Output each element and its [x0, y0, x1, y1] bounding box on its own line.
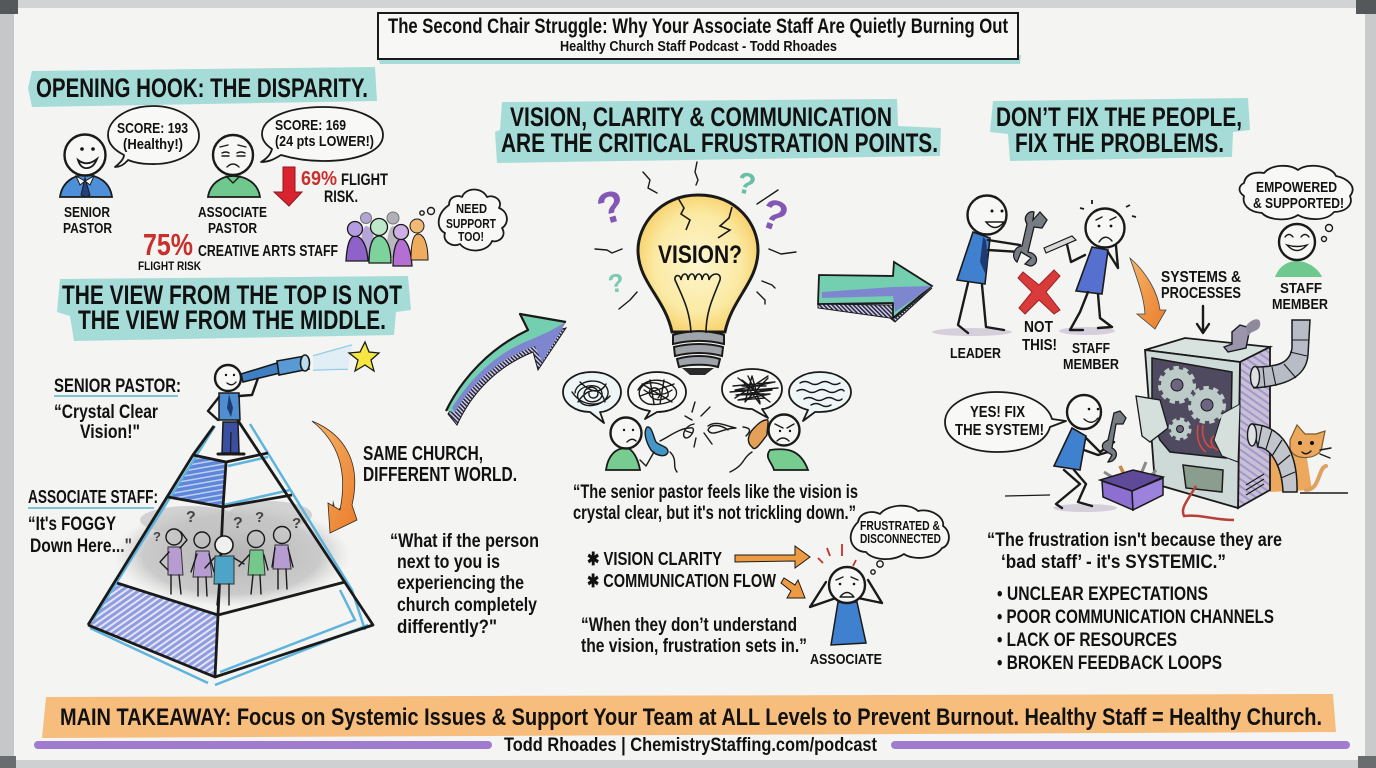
staff member worried figure: STAFF: [1072, 340, 1110, 357]
quote: senior pastor feels: [573, 482, 858, 524]
gears: [1161, 369, 1223, 438]
decorative bulb sparks and question marks: ?: [734, 166, 759, 202]
machine chimney: [1224, 325, 1250, 352]
associate staff label: Down Here...": [30, 536, 132, 557]
bullet list: systemic problems: • BROKEN FEEDBACK LOOPS: [997, 653, 1222, 674]
stat: 75% flight risk creative arts staff: CREATIVE ARTS STAFF: [198, 243, 338, 260]
associate pastor figure: ASSOCIATE: [198, 204, 267, 221]
machine side: [1238, 347, 1270, 508]
heading: fix the problems: DON’T FIX THE PEOPLE,: [996, 102, 1242, 132]
quote: frustration systemic: ‘bad staff’ - it's SYSTEMIC.”: [1001, 552, 1226, 573]
people in fog: ?: [255, 509, 264, 526]
staff member happy figure: [1272, 224, 1328, 313]
machine front: [1145, 350, 1240, 508]
arrow: communication flow to associate: [781, 578, 805, 598]
arrow: large curved up: [446, 314, 566, 425]
panel: opening hook: [28, 67, 507, 273]
heading: vision clarity: ARE THE CRITICAL FRUSTRATION POINTS.: [501, 128, 938, 158]
thought cloud: need support too: NEED: [456, 201, 487, 216]
speech bubble: score 169: [261, 107, 383, 162]
staff member worried figure: [1044, 200, 1136, 373]
machine interior: [1152, 358, 1232, 458]
quote: what if the person: next to you is: [397, 552, 500, 573]
thought cloud: need support too: SUPPORT: [446, 216, 496, 231]
label: systems and processes: SYSTEMS &: [1161, 269, 1241, 286]
senior pastor label: Vision!": [80, 422, 140, 443]
stat: 69% flight risk: RISK.: [324, 187, 358, 206]
quote: what if the person: church completely: [397, 595, 537, 616]
decorative bulb sparks and question marks: [592, 162, 796, 309]
people in fog: ?: [292, 515, 301, 532]
thought cloud: empowered and supported: & SUPPORTED!: [1253, 195, 1344, 212]
thought cloud: empowered and supported: [1240, 166, 1353, 242]
icon: red X not this: THIS!: [1022, 337, 1057, 354]
heading: vision clarity: [495, 99, 941, 163]
label: systems and processes: [1161, 269, 1241, 333]
thought cloud: frustrated and disconnected: FRUSTRATED &: [860, 519, 940, 533]
list: vision clarity and communication flow: ✱ VISION CLARITY: [587, 549, 722, 569]
people in fog: ?: [233, 515, 243, 532]
top duct: [1254, 320, 1310, 388]
speech bubble: score 169: (24 pts LOWER!): [275, 133, 374, 150]
quote: what if the person: experiencing the: [397, 573, 524, 594]
heading: view from the top: THE VIEW FROM THE TOP IS NOT: [62, 280, 402, 310]
pyramid blue offset lines: [90, 424, 368, 685]
leader figure with wrench: [932, 196, 1047, 362]
stat: 75% flight risk creative arts staff: [138, 227, 338, 273]
quote: when they don't understand: the vision, frustration sets in.”: [581, 636, 807, 657]
arrow: large right arrow: [818, 262, 932, 322]
panel: fix the problems: [932, 98, 1353, 674]
thought cloud: frustrated and disconnected: [851, 506, 949, 574]
decorative bulb sparks and question marks: ?: [606, 267, 627, 299]
senior pastor label: [54, 376, 181, 443]
icon: cracked lightbulb: [638, 195, 758, 375]
associate pastor figure: PASTOR: [208, 220, 257, 237]
footer credit: Todd Rhoades | ChemistryStaffing.com/podcast: [504, 735, 878, 756]
icon: purple toolbox: [1100, 462, 1163, 510]
panel: view from the top: [28, 276, 539, 685]
icon: red down arrow: [274, 167, 302, 206]
icon: creative staff group: [346, 212, 428, 266]
icon: star: [349, 342, 379, 371]
speech bubble: score 193: SCORE: 193: [117, 120, 188, 137]
associate staff label: “It's FOGGY: [28, 514, 116, 535]
associate frustrated figure: [810, 544, 882, 668]
heading: view from the top: [57, 276, 411, 341]
icon: red X not this: NOT: [1024, 319, 1053, 336]
quote: what if the person: [390, 531, 539, 638]
speech bubbles with scribbles: [563, 369, 851, 423]
icon: cracked lightbulb: VISION?: [658, 241, 742, 269]
arrow: orange to machine: [1130, 258, 1166, 329]
title box: The Second Chair Struggle: Why Your Associate Staff Are Quietly Burning Out: [388, 15, 1008, 38]
heading: view from the top: THE VIEW FROM THE MIDDLE.: [78, 305, 386, 335]
leader figure with wrench: LEADER: [950, 345, 1001, 362]
quote: frustration systemic: “The frustration isn't because they are: [987, 530, 1282, 551]
bullet list: systemic problems: • POOR COMMUNICATION CHANNELS: [997, 607, 1274, 628]
pyramid outline: [88, 413, 373, 677]
thought cloud: need support too: TOO!: [458, 229, 484, 244]
senior pastor with telescope: [208, 345, 352, 454]
title box: Healthy Church Staff Podcast - Todd Rhoades: [560, 39, 837, 55]
thought cloud: frustrated and disconnected: DISCONNECTED: [860, 532, 941, 546]
senior pastor figure: PASTOR: [63, 220, 112, 237]
speech bubble: yes fix the system: THE SYSTEM!: [955, 422, 1044, 439]
senior pastor label: “Crystal Clear: [54, 402, 158, 423]
speech bubble: score 169: SCORE: 169: [275, 117, 346, 134]
icon: red X not this: [1018, 270, 1060, 354]
stat: 75% flight risk creative arts staff: FLIGHT RISK: [138, 259, 201, 273]
speech bubble: yes fix the system: YES! FIX: [970, 404, 1025, 421]
text: same church different world: DIFFERENT WORLD.: [363, 464, 517, 486]
stat: 69% flight risk: FLIGHT: [341, 170, 388, 189]
lower duct: [1252, 424, 1297, 492]
heading: fix the problems: [990, 98, 1250, 161]
speech bubble: score 193: [108, 106, 199, 167]
senior pastor label: SENIOR PASTOR:: [54, 376, 181, 397]
quote: what if the person: differently?": [397, 617, 497, 638]
icon: orange cat: [1268, 425, 1348, 493]
machine top: [1145, 338, 1270, 362]
bullet list: systemic problems: • UNCLEAR EXPECTATIONS: [997, 584, 1208, 605]
associate pastor figure: [198, 135, 267, 237]
associate staff label: ASSOCIATE STAFF:: [28, 487, 158, 507]
text: same church different world: [363, 443, 517, 486]
arrow: orange curved down: [310, 421, 357, 533]
people in fog: ?: [153, 529, 161, 544]
heading: opening hook: [28, 67, 377, 107]
arrow: vision clarity to associate: [735, 546, 810, 568]
heading: opening hook: OPENING HOOK: THE DISPARITY.: [36, 73, 368, 103]
quote: when they don't understand: [581, 615, 807, 657]
thought cloud: empowered and supported: EMPOWERED: [1256, 179, 1337, 196]
quote: what if the person: “What if the person: [390, 531, 539, 552]
quote: frustration systemic: [987, 530, 1282, 573]
quote: senior pastor feels: crystal clear, but it's not trickling down.”: [573, 503, 856, 524]
text: same church different world: SAME CHURCH,: [363, 443, 483, 465]
thought cloud: need support too: [420, 190, 507, 250]
quote: when they don't understand: “When they don’t understand: [581, 615, 797, 636]
panel: vision clarity communication: [495, 99, 949, 668]
staff member worried figure: MEMBER: [1063, 356, 1119, 373]
stat: 69% flight risk: 69%: [301, 168, 337, 190]
label: systems and processes: PROCESSES: [1161, 285, 1241, 302]
staff member happy figure: MEMBER: [1272, 296, 1328, 313]
list: vision clarity and communication flow: ✱ COMMUNICATION FLOW: [587, 571, 776, 591]
senior pastor figure: SENIOR: [64, 204, 110, 221]
broken machine with gears: [1136, 319, 1310, 520]
title box: [378, 13, 1021, 64]
people in fog: [153, 509, 301, 605]
footer credit: [34, 735, 1350, 756]
machine vent: [1183, 465, 1223, 492]
stat: 75% flight risk creative arts staff: 75%: [143, 227, 193, 262]
bullet list: systemic problems: [997, 584, 1274, 674]
pyramid: [88, 413, 373, 685]
main takeaway banner: [42, 694, 1336, 738]
speech bubble: yes fix the system: [945, 392, 1066, 452]
staff member happy figure: STAFF: [1280, 280, 1322, 297]
decorative bulb sparks and question marks: ?: [754, 189, 794, 242]
stat: 69% flight risk: [301, 168, 388, 206]
heading: vision clarity: VISION, CLARITY & COMMUNICATION: [510, 102, 892, 132]
associate frustrated figure: ASSOCIATE: [810, 651, 882, 668]
quote: senior pastor feels: “The senior pastor feels like the vision is: [573, 482, 858, 503]
worker fixing the system: [1005, 395, 1126, 512]
heading: fix the problems: FIX THE PROBLEMS.: [1015, 128, 1224, 158]
speech bubble: score 193: (Healthy!): [123, 136, 183, 153]
list: vision clarity and communication flow: [587, 549, 776, 591]
associate staff label: [28, 487, 158, 557]
bullet list: systemic problems: • LACK OF RESOURCES: [997, 630, 1177, 651]
two people on broken phone line: [606, 402, 808, 472]
pyramid fills: [170, 456, 226, 507]
decorative bulb sparks and question marks: ?: [592, 181, 630, 235]
people in fog: ?: [186, 509, 196, 526]
senior pastor figure: [60, 134, 112, 237]
